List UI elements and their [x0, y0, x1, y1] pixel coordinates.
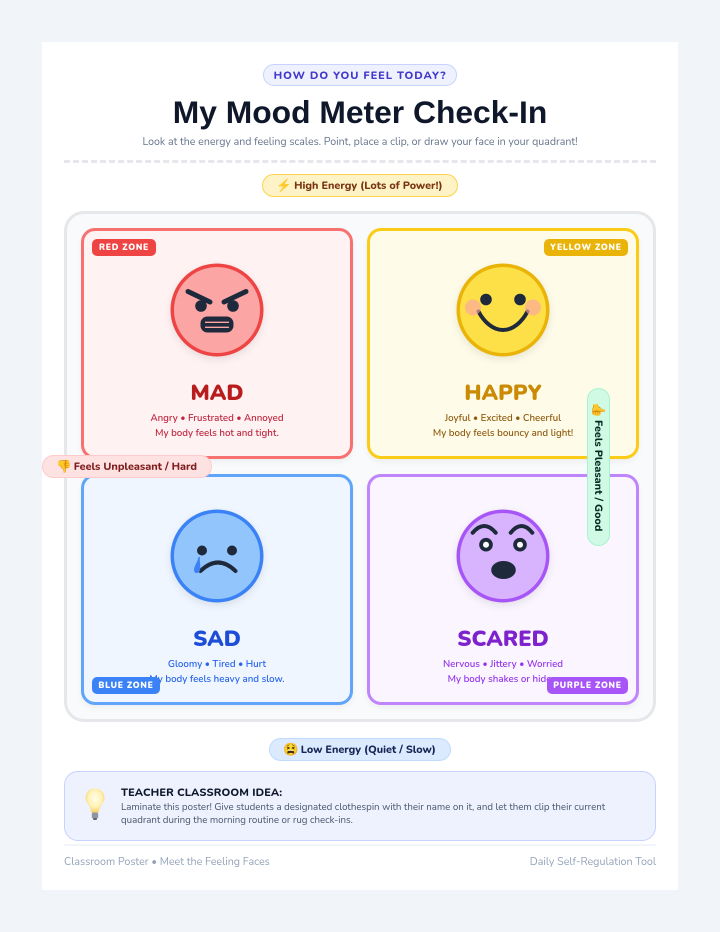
feeling words: Joyful • Excited • Cheerful [445, 412, 561, 425]
idea text: Laminate this poster! Give students a designated clothespin with their name on it, and let them clip their current quadrant during the morning routine or rug check-ins. [121, 801, 605, 826]
zone badge: red: RED ZONE [99, 242, 149, 254]
dashed divider [64, 160, 656, 163]
face: happy [456, 264, 550, 360]
axis label: high energy: ⚡️ [276, 177, 292, 194]
zone badge: blue: BLUE ZONE [98, 680, 154, 692]
tag: how do you feel today: HOW DO YOU FEEL TODAY? [274, 68, 446, 82]
zone badge: purple: PURPLE ZONE [553, 680, 622, 692]
axis label: high energy [262, 174, 458, 197]
zone badge: yellow [544, 239, 628, 256]
footer rule [64, 844, 656, 846]
axis label: feels pleasant: Feels Pleasant / Good [591, 420, 606, 531]
idea heading: TEACHER CLASSROOM IDEA: [121, 785, 282, 800]
teacher idea panel [64, 771, 656, 841]
axis label: feels pleasant: 👍 [590, 402, 607, 417]
quadrant: mad [81, 228, 353, 459]
face: angry [170, 264, 264, 360]
axis label: feels unpleasant [42, 455, 212, 478]
heading: scared: SCARED [457, 624, 549, 654]
axis label: feels unpleasant: Feels Unpleasant / Hard [74, 459, 197, 474]
axis label: low energy [269, 738, 451, 761]
body sentence: My body feels heavy and slow. [149, 673, 285, 686]
body sentence: My body shakes or hides. [448, 673, 558, 686]
zone badge: yellow: YELLOW ZONE [550, 242, 622, 254]
axis label: high energy: High Energy (Lots of Power!) [294, 178, 443, 193]
axis label: feels unpleasant: 👎 [56, 458, 71, 475]
mood grid panel [64, 211, 656, 722]
title: My Mood Meter Check-In [173, 94, 547, 130]
quadrant: happy [367, 228, 639, 459]
quadrant: sad [81, 474, 353, 705]
feeling words: Angry • Frustrated • Annoyed [150, 412, 284, 425]
zone badge: blue [92, 677, 160, 694]
body sentence: My body feels bouncy and light! [433, 427, 573, 440]
face: sad [170, 510, 264, 606]
axis label: low energy: 😫 [283, 741, 299, 758]
subtitle: Look at the energy and feeling scales. Point, place a clip, or draw your face in your quadrant! [142, 134, 578, 149]
axis label: low energy: Low Energy (Quiet / Slow) [301, 742, 436, 757]
quadrant: scared [367, 474, 639, 705]
axis label: feels pleasant [587, 388, 610, 546]
body sentence: My body feels hot and tight. [155, 427, 279, 440]
zone badge: red [92, 239, 156, 256]
tag: how do you feel today [263, 64, 457, 86]
face: scared [456, 510, 550, 606]
zone badge: purple [547, 677, 628, 694]
footer right: Daily Self-Regulation Tool [530, 854, 656, 869]
heading: sad: SAD [193, 624, 241, 654]
heading: happy: HAPPY [464, 378, 542, 408]
feeling words: Gloomy • Tired • Hurt [168, 658, 266, 671]
icon: light bulb [86, 788, 104, 820]
heading: mad: MAD [190, 378, 244, 408]
footer left: Classroom Poster • Meet the Feeling Faces [64, 854, 270, 869]
feeling words: Nervous • Jittery • Worried [443, 658, 563, 671]
